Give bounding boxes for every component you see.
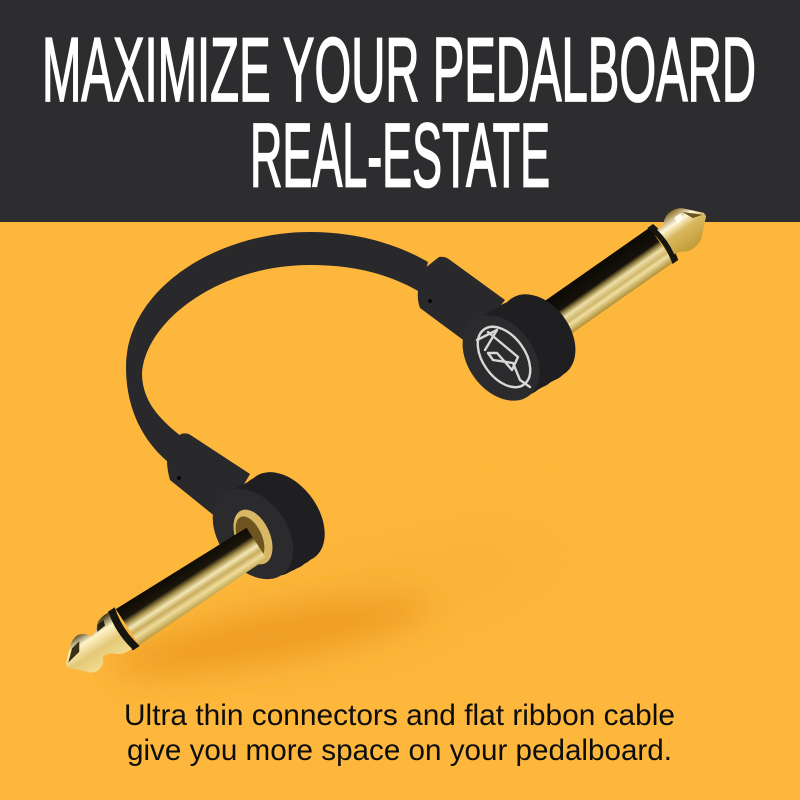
header band [0, 0, 800, 222]
bottom connector collar [226, 504, 280, 570]
top plug [418, 196, 718, 415]
floor shadow [103, 505, 594, 693]
bottom plug barrel [54, 524, 269, 685]
bottom connector vent hole [177, 476, 181, 480]
flat ribbon cable [126, 232, 428, 462]
bottom plug [54, 433, 341, 685]
brand logo [467, 317, 541, 397]
top connector disc [447, 280, 591, 415]
title [42, 20, 756, 206]
caption: Ultra thin connectors and flat ribbon cable [124, 699, 675, 732]
bottom connector disc [196, 457, 341, 594]
top plug barrel [537, 196, 718, 341]
bottom connector housing [167, 433, 250, 522]
top connector vent hole [428, 299, 432, 303]
background panel [0, 222, 800, 800]
top connector housing [418, 257, 505, 345]
caption: give you more space on your pedalboard. [127, 734, 672, 767]
caption [124, 699, 675, 767]
